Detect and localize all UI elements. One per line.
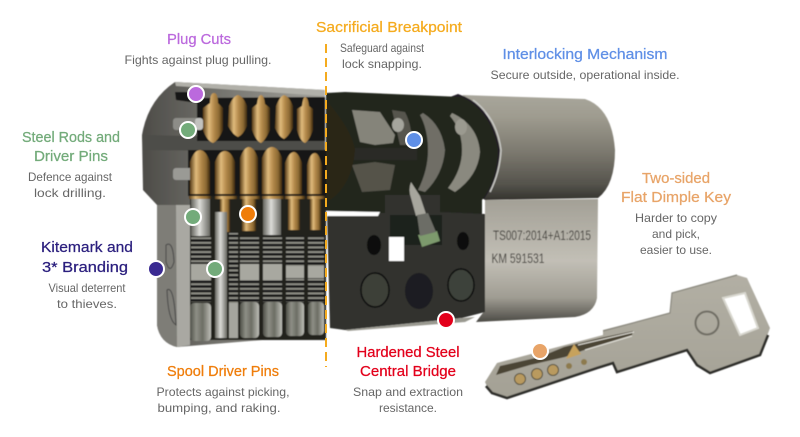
- plate: lower housing with stamped text: [476, 199, 598, 322]
- label: two-sided flat dimple key: Flat Dimple Key: [621, 190, 732, 206]
- label: steel rods and driver pins: lock drilling.: [34, 186, 106, 200]
- lower brass driver pins: [189, 147, 325, 232]
- label: two-sided flat dimple key: and pick,: [652, 227, 700, 241]
- label: steel rods and driver pins: [22, 130, 120, 200]
- key: [485, 275, 770, 398]
- label: spool driver pins: [156, 364, 290, 415]
- hardened steel bridge: [326, 195, 485, 331]
- label: kitemark branding: Kitemark and: [41, 240, 133, 256]
- marker: interlocking mechanism: [406, 132, 422, 148]
- label: sacrificial breakpoint: Safeguard against: [340, 41, 425, 55]
- label: hardened steel central bridge: Hardened Steel: [356, 345, 460, 361]
- label: kitemark branding: Visual deterrent: [48, 281, 126, 295]
- plate: lower housing with stamped text: KM 591531: [492, 250, 545, 266]
- label: hardened steel central bridge: Central Bridge: [360, 364, 456, 380]
- label: interlocking mechanism: Interlocking Mechanism: [502, 47, 668, 63]
- label: hardened steel central bridge: Snap and extraction: [353, 385, 463, 399]
- left cutaway body: [142, 82, 326, 347]
- label: two-sided flat dimple key: easier to use.: [640, 243, 712, 257]
- marker: spool driver pins: [240, 206, 256, 222]
- illustration: cutaway lock cylinder: [142, 82, 615, 347]
- label: hardened steel central bridge: [353, 345, 463, 415]
- label: kitemark branding: [41, 240, 133, 311]
- label: spool driver pins: Protects against picking,: [156, 385, 290, 399]
- label: two-sided flat dimple key: Two-sided: [642, 171, 710, 187]
- marker dots: [148, 86, 548, 359]
- marker: plug cuts: [188, 86, 204, 102]
- marker: steel rods upper: [180, 122, 196, 138]
- label: sacrificial breakpoint: lock snapping.: [342, 57, 422, 71]
- label: two-sided flat dimple key: Harder to copy: [635, 211, 717, 225]
- label: spool driver pins: bumping, and raking.: [158, 401, 280, 415]
- label: plug cuts: Fights against plug pulling.: [124, 53, 272, 67]
- marker: steel rods lower: [185, 209, 201, 225]
- label: kitemark branding: 3* Branding: [42, 260, 128, 276]
- label: plug cuts: [124, 32, 272, 67]
- label: plug cuts: Plug Cuts: [167, 32, 231, 48]
- marker: kitemark branding: [148, 261, 164, 277]
- label: steel rods and driver pins: Steel Rods and: [22, 130, 120, 146]
- label: sacrificial breakpoint: [316, 20, 462, 71]
- steel rods: [173, 118, 203, 180]
- label: steel rods and driver pins: Driver Pins: [34, 149, 108, 165]
- screw: [410, 182, 440, 247]
- label: spool driver pins: Spool Driver Pins: [167, 364, 279, 380]
- cylinder: right outer barrel: [450, 94, 615, 200]
- marker: driver pins: [207, 261, 223, 277]
- marker: flat dimple key: [532, 343, 548, 359]
- label: hardened steel central bridge: resistance.: [379, 401, 437, 415]
- spool pins and springs: [190, 199, 324, 341]
- label: two-sided flat dimple key: [621, 171, 732, 257]
- dashed breakpoint line: [325, 44, 327, 367]
- plate: lower housing with stamped text: TS007:2014+A1:2015: [493, 227, 591, 243]
- marker: central bridge: [438, 312, 454, 328]
- label: kitemark branding: to thieves.: [57, 297, 117, 311]
- interlocking mechanism interior: [326, 92, 498, 215]
- label: steel rods and driver pins: Defence against: [28, 170, 113, 184]
- upper brass pins: [203, 93, 313, 143]
- label: sacrificial breakpoint: Sacrificial Breakpoint: [316, 20, 462, 36]
- label: interlocking mechanism: Secure outside, operational inside.: [490, 68, 680, 82]
- label: interlocking mechanism: [490, 47, 680, 82]
